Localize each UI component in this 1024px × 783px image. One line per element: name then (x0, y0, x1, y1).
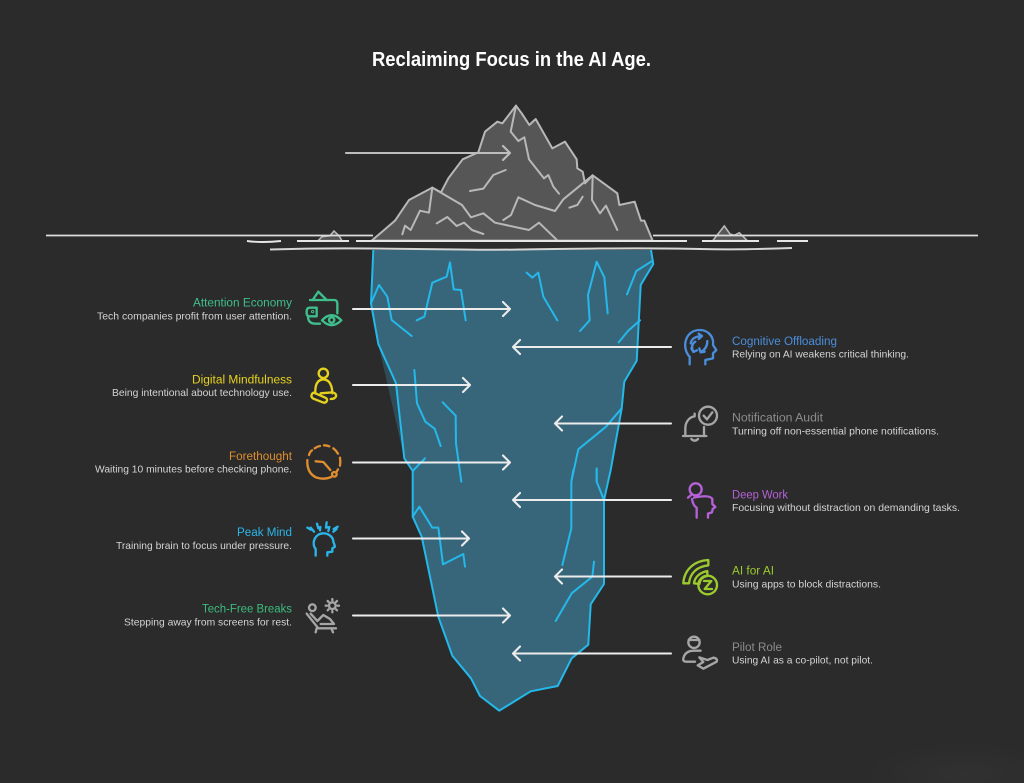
item: Tech-Free Breaks (124, 599, 510, 632)
item: Forethought (95, 445, 510, 479)
arrow (555, 570, 671, 584)
heading: Forethought (229, 451, 293, 463)
heading: AI for AI (732, 566, 774, 578)
item: Attention Economy (97, 292, 510, 325)
top arrow pointing into iceberg tip (346, 146, 510, 160)
item: Notification Audit (555, 407, 939, 441)
heading: Notification Audit (732, 413, 824, 425)
description: Relying on AI weakens critical thinking. (732, 349, 909, 361)
heading: Deep Work (732, 489, 788, 501)
heading: Peak Mind (237, 527, 292, 539)
arrow (353, 378, 470, 392)
item: AI for AI (555, 560, 881, 594)
iceberg tip above water (372, 106, 653, 241)
arrow (353, 456, 510, 470)
icon: dashed clock (307, 445, 340, 479)
title: Reclaiming Focus in the AI Age. (372, 49, 651, 71)
heading: Attention Economy (193, 298, 292, 310)
icon: bell with check (683, 407, 717, 441)
description: Focusing without distraction on demanding tasks. (732, 502, 960, 514)
item: Cognitive Offloading (513, 330, 909, 364)
arrow (353, 608, 510, 622)
arrow (353, 302, 510, 316)
water surface lines and small ice islets (46, 226, 978, 250)
icon: signal arcs with Z badge (683, 560, 717, 594)
item: Digital Mindfulness (112, 369, 470, 403)
arrow (555, 416, 671, 430)
description: Using AI as a co-pilot, not pilot. (732, 655, 873, 667)
heading: Pilot Role (732, 642, 782, 654)
icon: person resting under sun (307, 599, 339, 632)
arrow (513, 646, 671, 660)
icon: meditating person (311, 369, 336, 403)
heading: Cognitive Offloading (732, 336, 837, 348)
item: Peak Mind (116, 522, 469, 556)
description: Turning off non-essential phone notifications. (732, 425, 939, 437)
icon: head with magnifier (688, 483, 715, 518)
icon: head with cycle arrows (685, 330, 716, 364)
icon: head with lightning bolts (307, 522, 338, 556)
icon: wallet with eye (307, 292, 341, 325)
iceberg (371, 106, 653, 711)
heading: Digital Mindfulness (192, 374, 292, 386)
arrow (513, 340, 671, 354)
icon: pilot with airplane (683, 637, 717, 669)
description: Stepping away from screens for rest. (124, 617, 292, 629)
item: Pilot Role (513, 637, 873, 669)
description: Being intentional about technology use. (112, 387, 292, 399)
item: Deep Work (513, 483, 960, 518)
arrow (513, 493, 671, 507)
description: Using apps to block distractions. (732, 578, 881, 590)
heading: Tech-Free Breaks (202, 604, 292, 616)
description: Training brain to focus under pressure. (116, 540, 292, 552)
arrow (353, 532, 469, 546)
description: Tech companies profit from user attention. (97, 310, 292, 322)
description: Waiting 10 minutes before checking phone. (95, 464, 292, 476)
iceberg underwater part (371, 250, 653, 711)
